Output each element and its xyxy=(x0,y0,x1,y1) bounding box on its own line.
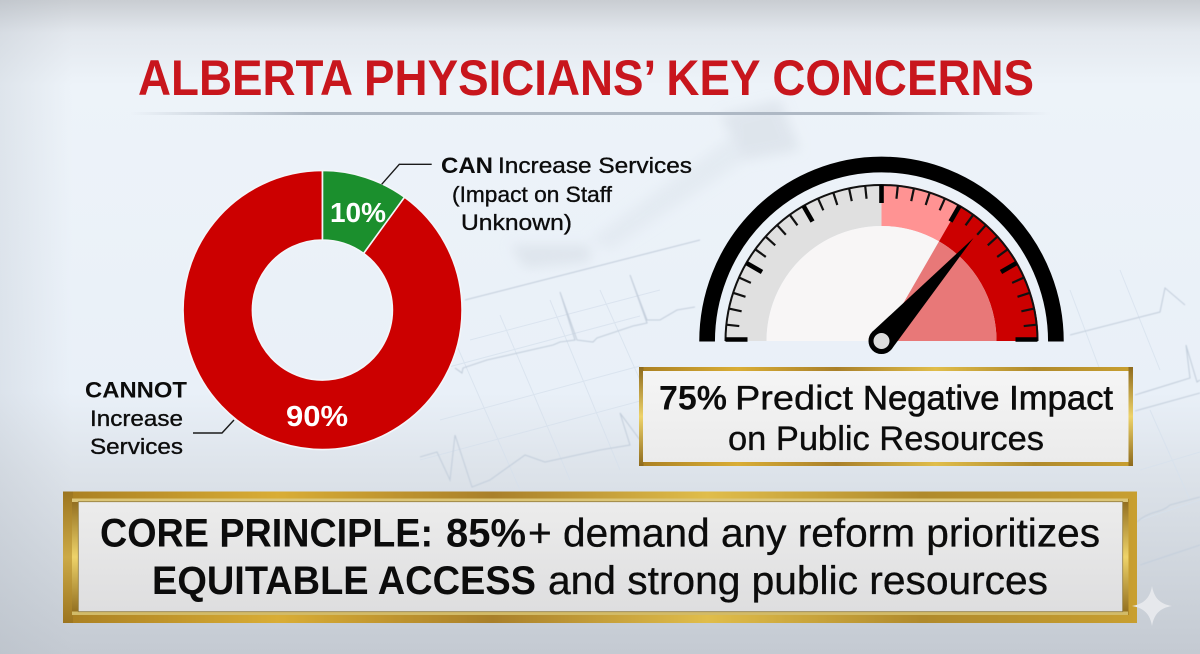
title rule xyxy=(130,112,1050,115)
callout box: core principle: CORE PRINCIPLE: xyxy=(100,512,433,556)
gauge major ticks xyxy=(726,185,1038,340)
segment: can increase 10% xyxy=(322,170,404,253)
callout box: core principle: EQUITABLE ACCESS xyxy=(152,559,536,603)
gauge xyxy=(707,164,1056,352)
callout box: core principle: 85% xyxy=(446,512,526,556)
gauge outer arc xyxy=(707,164,1056,342)
callout box: core principle xyxy=(63,492,1137,623)
callout: can increase services: CAN xyxy=(441,153,493,178)
callout: cannot increase services: Increase xyxy=(90,406,183,431)
donut chart xyxy=(183,170,462,449)
callout: cannot increase services: CANNOT xyxy=(85,378,187,402)
callout box: core principle: + demand any reform prioritizes xyxy=(528,512,1100,556)
gauge scale band xyxy=(724,184,1038,341)
title: ALBERTA PHYSICIANS’ KEY CONCERNS xyxy=(138,50,1034,106)
callout: can increase services: Increase Services xyxy=(498,153,692,178)
callout box: 75% predict negative impact: Predict xyxy=(735,380,854,418)
callout: cannot increase services: Services xyxy=(90,434,183,459)
callout: cannot increase services xyxy=(85,378,234,459)
value: 90%: 90% xyxy=(286,401,348,433)
segment: cannot increase 90% xyxy=(183,170,462,449)
value: 10%: 10% xyxy=(330,197,386,228)
callout: can increase services xyxy=(382,153,692,235)
gauge needle xyxy=(871,238,974,352)
callout box: 75% predict negative impact: Negative Impact xyxy=(863,380,1114,418)
callout box: 75% predict negative impact: 75% xyxy=(659,380,727,418)
gauge minor ticks xyxy=(726,186,1037,326)
callout: can increase services: (Impact on Staff xyxy=(452,182,613,207)
callout box: 75% predict negative impact xyxy=(639,367,1133,466)
callout: can increase services: Unknown) xyxy=(461,210,572,235)
icon: sparkle watermark xyxy=(1132,586,1172,626)
callout box: 75% predict negative impact: on Public Resources xyxy=(728,420,1044,458)
callout box: core principle: and strong public resources xyxy=(548,559,1048,603)
